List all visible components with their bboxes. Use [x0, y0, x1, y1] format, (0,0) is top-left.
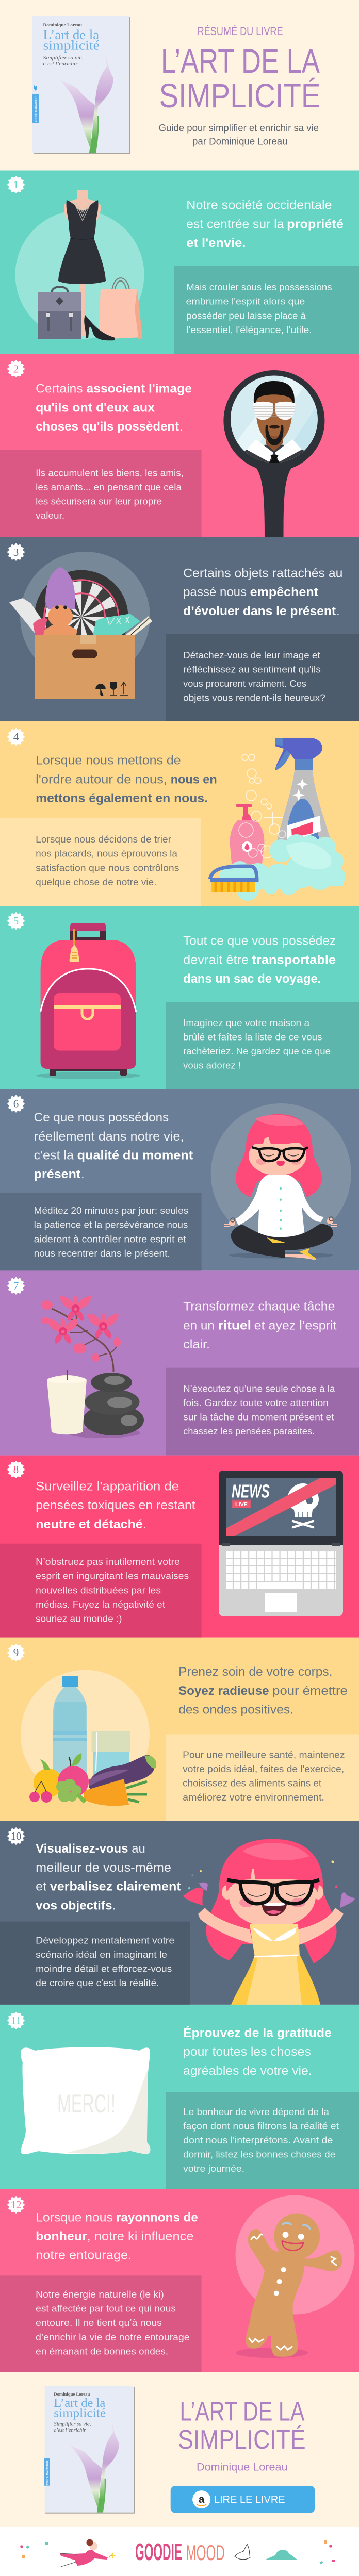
callout: objets vous rendent-ils heureux? — [183, 693, 325, 703]
book cover: Dominique Loreau — [43, 22, 82, 27]
callout — [166, 2092, 359, 2189]
callout: Détachez-vous de leur image et — [183, 650, 320, 660]
badge 4: 4 — [13, 731, 19, 743]
panel: goodie mood footer — [0, 2527, 359, 2576]
heading — [178, 1665, 348, 1717]
book cover: c’est l’enrichir — [54, 2428, 86, 2433]
callout: Mais crouler sous les possessions — [186, 282, 332, 292]
badge 9: 9 — [13, 1646, 19, 1659]
panel: footer book — [0, 2372, 359, 2527]
callout: aideront à contrôler notre esprit et — [34, 1234, 186, 1244]
callout: sur la tâche du moment présent et — [183, 1412, 334, 1423]
heading: Soyez radieuse — [178, 1684, 269, 1698]
panel: 8 — [0, 1456, 359, 1638]
panel: 12 — [0, 2189, 359, 2372]
heading: neutre et détaché — [36, 1517, 143, 1531]
button: lire le livre — [171, 2486, 315, 2513]
callout: scénario idéal en imaginant le — [36, 1950, 167, 1960]
callout: rachèteriez. Ne gardez que ce que — [183, 1046, 331, 1056]
badge 6: 6 — [13, 1098, 19, 1110]
title: L’ART DE LA — [161, 42, 320, 80]
heading: . — [336, 604, 340, 618]
logo text: MOOD — [186, 2540, 225, 2565]
heading — [183, 2025, 332, 2078]
heading — [36, 2210, 198, 2262]
heading: qu'ils ont d'eux aux — [36, 401, 155, 415]
badge 10 — [8, 1828, 24, 1844]
heading: pour toutes les choses — [183, 2045, 311, 2059]
callout: façon dont nous filtrons la réalité et — [183, 2121, 339, 2131]
callout: nouvelles distribuées par les — [36, 1585, 161, 1595]
book cover: Dominique Loreau — [54, 2392, 90, 2397]
book cover: c’est l’enrichir — [43, 61, 78, 67]
heading: vos objectifs — [36, 1898, 112, 1912]
heading — [183, 1299, 337, 1351]
icon: amazon: a — [199, 2494, 205, 2505]
book cover — [44, 2386, 135, 2514]
callout: les amants... en pensant que cela — [36, 482, 182, 492]
heading: . — [180, 420, 183, 434]
panel: 11 — [0, 2005, 359, 2189]
callout: embrume l'esprit alors que — [186, 296, 305, 307]
callout: brûlé et faîtes la liste de ce vous — [183, 1032, 322, 1043]
badge 4 — [8, 729, 24, 745]
badge 8 — [8, 1462, 24, 1477]
callout: quelque chose de notre vie. — [36, 877, 157, 887]
panel: 1 — [0, 170, 359, 354]
heading: rituel — [218, 1318, 251, 1332]
heading: Transformez chaque tâche — [183, 1299, 335, 1314]
callout: entoure. Il ne tient qu’à nous — [36, 2318, 162, 2328]
illustration: orchid, candle and stones — [41, 1295, 144, 1438]
heading: agréables de votre vie. — [183, 2064, 312, 2078]
heading — [183, 566, 342, 618]
badge 3: 3 — [13, 546, 19, 558]
callout: votre poids idéal, faites de l'exercice, — [183, 1764, 344, 1774]
heading: passé nous — [183, 585, 247, 599]
icon: amazon — [192, 2490, 210, 2508]
heading: Certains objets rattachés au — [183, 566, 342, 581]
decorative confetti — [20, 2540, 335, 2564]
heading: mettons également en nous. — [36, 791, 208, 805]
heading: empêchent — [250, 585, 318, 599]
callout: Ils accumulent les biens, les amis, — [36, 468, 184, 478]
badge 12 — [8, 2198, 24, 2212]
heading: transportable — [252, 953, 336, 967]
title: SIMPLICITÉ — [159, 76, 321, 114]
callout: chassez les pensées parasites. — [183, 1426, 315, 1436]
heading: c'est la — [34, 1149, 74, 1163]
panel: 6 — [0, 1089, 359, 1270]
book cover: L’art de la — [54, 2397, 106, 2410]
illustration: cleaning products and foam — [210, 738, 346, 901]
book cover: POCHE MARABOUT — [46, 2460, 50, 2485]
illustration: radiant girl — [183, 1839, 355, 2005]
badge 11: 11 — [11, 2014, 21, 2027]
callout: votre journée. — [183, 2164, 244, 2174]
badge 7: 7 — [13, 1280, 19, 1292]
illustration: hand mirror with portrait — [223, 370, 324, 537]
heading: Lorsque nous mettons de — [36, 754, 181, 768]
illustration: meditating girl — [211, 1103, 351, 1260]
heading: l'ordre autour de nous, — [36, 772, 167, 786]
callout: améliorez votre environnement. — [183, 1792, 324, 1803]
heading: associent l'image — [86, 382, 192, 396]
heading: Surveillez l'apparition de — [36, 1480, 179, 1493]
panel: 5 — [0, 906, 359, 1089]
callout: de croire que c'est la réalité. — [36, 1978, 159, 1988]
book cover: simplicité — [43, 38, 100, 53]
callout — [166, 1002, 359, 1089]
heading: nous en — [171, 772, 217, 786]
heading: devrait être — [183, 953, 249, 967]
heading — [34, 1111, 193, 1181]
callout: choisissez des aliments sains et — [183, 1778, 321, 1788]
heading: Ce que nous possédons — [34, 1111, 169, 1125]
callout: N’obstruez pas inutilement votre — [36, 1557, 180, 1567]
title — [178, 2397, 306, 2455]
callout: fois. Gardez toute votre attention — [183, 1398, 329, 1408]
author: Dominique Loreau — [197, 2461, 288, 2473]
book cover: simplicité — [54, 2407, 106, 2420]
heading: pensées toxiques en restant — [36, 1498, 195, 1512]
callout: dont nous l'interprétons. Avant de — [183, 2135, 333, 2145]
icon: fairy — [60, 2539, 116, 2567]
illustration: laptop with toxic news — [219, 1471, 343, 1616]
callout: nos placards, nous éprouvons la — [36, 849, 178, 859]
heading: présent — [34, 1167, 80, 1181]
callout: satisfaction que nous contrôlons — [36, 863, 179, 873]
badge 9 — [8, 1645, 24, 1660]
illustration: merci pillow: MERCI! — [57, 2089, 116, 2118]
callout — [174, 266, 359, 354]
heading: Tout ce que vous possédez — [183, 934, 336, 948]
heading: qualité du moment — [77, 1149, 193, 1163]
heading: . — [143, 1517, 146, 1531]
heading — [183, 934, 336, 986]
badge 5 — [8, 914, 24, 928]
panel: 3 — [0, 537, 359, 721]
callout: d’enrichir la vie de notre entourage — [36, 2332, 189, 2342]
callout — [0, 818, 201, 906]
book cover — [32, 16, 130, 154]
illustration: box of old objects — [9, 552, 152, 699]
callout — [0, 2275, 202, 2372]
callout: nous recentrer dans le présent. — [34, 1248, 170, 1259]
heading: , notre ki influence — [87, 2230, 194, 2243]
panel: 10 — [0, 1821, 359, 2005]
callout — [0, 450, 202, 537]
callout: la patience et la persévérance nous — [34, 1220, 188, 1230]
heading: . — [81, 1167, 85, 1181]
callout: souriez au monde :) — [36, 1613, 122, 1624]
badge 5: 5 — [13, 915, 19, 927]
callout: Imaginez que votre maison a — [183, 1018, 310, 1028]
badge 8: 8 — [13, 1463, 19, 1476]
heading: verbalisez clairement — [50, 1880, 181, 1893]
heading: notre entourage. — [36, 2248, 132, 2262]
callout: valeur. — [36, 510, 64, 521]
heading: propriété — [287, 217, 344, 231]
logo text: GOODIE — [135, 2538, 182, 2565]
heading: des ondes positives. — [178, 1703, 293, 1717]
badge 11 — [8, 2013, 24, 2028]
panel: 2 — [0, 354, 359, 537]
button: lire le livre: LIRE LE LIVRE — [214, 2494, 285, 2505]
tagline: Guide pour simplifier et enrichir sa vie — [159, 123, 319, 134]
callout: vous adorez ! — [183, 1061, 241, 1071]
callout — [166, 1735, 359, 1821]
heading: Visualisez-vous — [36, 1842, 128, 1856]
title — [159, 42, 321, 114]
subtitle: résumé du livre: RÉSUMÉ DU LIVRE — [198, 25, 283, 38]
heading: au — [132, 1842, 145, 1856]
heading — [36, 1842, 181, 1912]
illustration: laptop with toxic news: NEWS — [232, 1480, 270, 1501]
heading: Prenez soin de votre corps. — [178, 1665, 332, 1679]
illustration: travel bag — [36, 923, 140, 1079]
heading — [36, 754, 217, 805]
heading — [36, 382, 192, 434]
book cover: L’art de la — [43, 27, 100, 42]
callout: l'essentiel, l'élégance, l'utile. — [186, 325, 312, 335]
callout — [0, 1922, 190, 2005]
callout: Pour une meilleure santé, maintenez — [183, 1749, 345, 1760]
illustration: laptop with toxic news: LIVE — [235, 1502, 248, 1508]
callout: posséder peu laisse place à — [186, 310, 306, 321]
callout: Le bonheur de vivre dépend de la — [183, 2107, 330, 2117]
tagline: par Dominique Loreau — [192, 137, 288, 147]
heading: en un — [183, 1318, 215, 1332]
badge 2: 2 — [13, 362, 19, 375]
badge 2 — [8, 361, 24, 376]
badge 7 — [8, 1278, 24, 1293]
callout: N’éxecutez qu’une seule chose à la — [183, 1384, 335, 1394]
callout: dormir, listez les bonnes choses de — [183, 2149, 335, 2159]
callout: Méditez 20 minutes par jour: seules — [34, 1206, 188, 1216]
heading: clair. — [183, 1337, 210, 1351]
heading: rayonnons de — [116, 2210, 198, 2224]
book cover: Simplifier sa vie, — [54, 2422, 91, 2428]
heading: pour émettre — [272, 1684, 348, 1698]
panel: 7 — [0, 1270, 359, 1456]
callout — [166, 634, 359, 721]
heading — [36, 1480, 195, 1531]
heading: Notre société occidentale — [186, 198, 332, 212]
callout: en émanant de bonnes ondes. — [36, 2346, 168, 2356]
heading: dans un sac de voyage. — [183, 972, 321, 986]
panel: 4 — [0, 721, 359, 906]
heading: d’évoluer dans le présent — [183, 604, 336, 618]
heading: Lorsque nous — [36, 2210, 113, 2224]
book cover: Simplifier sa vie, — [43, 55, 84, 61]
callout: Notre énergie naturelle (le ki) — [36, 2289, 164, 2300]
callout: esprit en ingurgitant les mauvaises — [36, 1571, 189, 1581]
heading: réellement dans notre vie, — [34, 1130, 184, 1144]
illustration: gingerbread man — [235, 2195, 355, 2358]
callout: les sécurisera sur leur propre — [36, 496, 162, 506]
icon: bird — [235, 2544, 250, 2560]
callout: médias. Fuyez la négativité et — [36, 1599, 165, 1610]
heading: et ayez l’esprit — [254, 1318, 337, 1332]
badge 12: 12 — [10, 2199, 22, 2211]
illustration: dress, bags and shoe — [15, 190, 144, 340]
callout — [0, 1193, 202, 1270]
callout: Lorsque nous décidons de trier — [36, 834, 171, 845]
tagline — [159, 123, 319, 147]
heading: choses qu'ils possèdent — [36, 420, 179, 434]
heading: et l'envie. — [186, 236, 246, 250]
heading: et — [36, 1880, 46, 1893]
heading: est centrée sur la — [186, 217, 284, 231]
panel: 9 — [0, 1638, 359, 1821]
title: L’ART DE LA — [180, 2397, 305, 2427]
heading: Certains — [36, 382, 83, 396]
callout — [0, 1544, 202, 1638]
heading: Éprouvez de la gratitude — [183, 2025, 332, 2040]
title: SIMPLICITÉ — [178, 2425, 306, 2455]
illustration: water and healthy food — [21, 1670, 156, 1806]
heading — [186, 198, 344, 250]
callout: est affectée par tout ce qui nous — [36, 2304, 176, 2314]
heading: meilleur de vous-même — [36, 1861, 171, 1875]
callout: vous procurent vraiment. Ces — [183, 679, 306, 689]
callout — [166, 1368, 359, 1456]
icon: cloud — [265, 2550, 298, 2560]
book cover: POCHE MARABOUT — [35, 96, 38, 122]
badge 6 — [8, 1096, 24, 1111]
panel: header — [0, 0, 359, 171]
callout: Développez mentalement votre — [36, 1935, 174, 1945]
badge 1 — [8, 177, 24, 192]
heading: . — [112, 1898, 116, 1912]
badge 10: 10 — [10, 1830, 22, 1842]
badge 3 — [8, 544, 24, 559]
callout: réfléchissez au sentiment qu'ils — [183, 664, 321, 674]
callout: moindre détail et efforcez-vous — [36, 1963, 172, 1974]
illustration: merci pillow — [21, 2047, 150, 2154]
heading: bonheur — [36, 2230, 87, 2243]
badge 1: 1 — [13, 178, 19, 191]
